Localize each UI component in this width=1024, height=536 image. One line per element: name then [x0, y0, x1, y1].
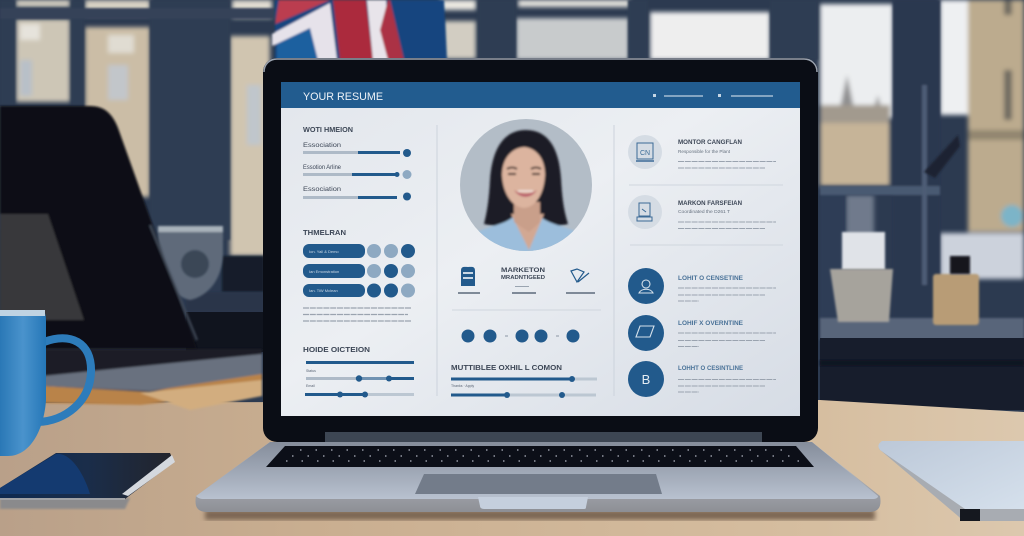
background laptop on the left — [0, 106, 262, 410]
keyboard — [266, 446, 814, 467]
experience card 1: Responsible for the Plant — [678, 149, 731, 154]
title: YOUR RESUME — [303, 91, 383, 103]
laptop lid — [263, 58, 818, 442]
blue coffee mug — [0, 310, 91, 456]
section: timeline pills: Ian. TiW Mclean — [309, 288, 338, 293]
closed laptop on the right — [878, 441, 1024, 521]
experience card 1: MONTOR CANGFLAN — [678, 140, 742, 146]
role block with icons: MRADNTIGEED — [501, 275, 545, 281]
right window sill with pot and jar — [820, 135, 1024, 410]
contact row 2: LOHIF X OVERNTINE — [678, 321, 743, 327]
header bar — [281, 82, 800, 108]
notch — [478, 497, 588, 509]
section: multiple email sliders — [451, 365, 597, 398]
laptop base — [196, 442, 880, 512]
section: work history skills: Essociation — [303, 187, 341, 193]
section: timeline pills — [303, 230, 415, 321]
contact row 2 — [628, 315, 776, 351]
section: work history skills: Essotion Arline — [303, 165, 342, 171]
section: work history skills: Essociation — [303, 143, 341, 149]
experience card 1 — [628, 135, 776, 169]
experience card 1: CN — [640, 150, 650, 157]
experience card 2 — [628, 195, 776, 229]
heading: THMELRAN — [303, 230, 346, 237]
role block with icons — [458, 267, 595, 294]
section: work history skills — [303, 127, 412, 200]
screen: resume layout — [281, 82, 800, 416]
experience card 2: Coordinated the D261 T — [678, 209, 730, 214]
section: home direction sliders: Email — [306, 384, 315, 388]
heading: HOIDE OICTEION — [303, 347, 370, 354]
laptop shadow on desk — [205, 510, 875, 520]
heading: WOTI HMEION — [303, 127, 353, 134]
desk surface — [0, 400, 1024, 536]
section: home direction sliders: Status — [306, 369, 316, 373]
experience card 2: MARKON FARSFEIAN — [678, 201, 742, 207]
section: timeline pills: Ion. Yall & Demo — [309, 249, 339, 254]
section: timeline pills: Ian Emonstration — [309, 269, 339, 274]
heading: MUTTIBLEE OXHIL L COMON — [451, 365, 562, 372]
trackpad — [415, 474, 662, 494]
contact row 3: B — [642, 372, 650, 387]
flag — [272, 0, 447, 60]
section: multiple email sliders: Thanks · Apply — [451, 384, 474, 388]
hinge — [325, 432, 762, 442]
icon: building — [461, 267, 475, 286]
contact row 1 — [628, 268, 776, 304]
profile photo — [460, 119, 592, 255]
blurred cup on the back sill — [158, 226, 223, 300]
smartphone — [0, 453, 175, 509]
window background with blurred buildings — [0, 0, 1024, 420]
section: home direction sliders — [303, 347, 414, 398]
contact row 1: LOHIT O CENSETINE — [678, 276, 743, 282]
icon: pen check — [571, 269, 589, 282]
paragraph — [303, 308, 411, 321]
social icon row — [462, 330, 580, 342]
column dividers — [437, 125, 614, 396]
contact row 3: LOHHT O CESINTLINE — [678, 366, 743, 372]
role title: MARKETON — [501, 267, 545, 274]
contact row 3 — [628, 361, 776, 397]
contact info — [653, 94, 773, 97]
